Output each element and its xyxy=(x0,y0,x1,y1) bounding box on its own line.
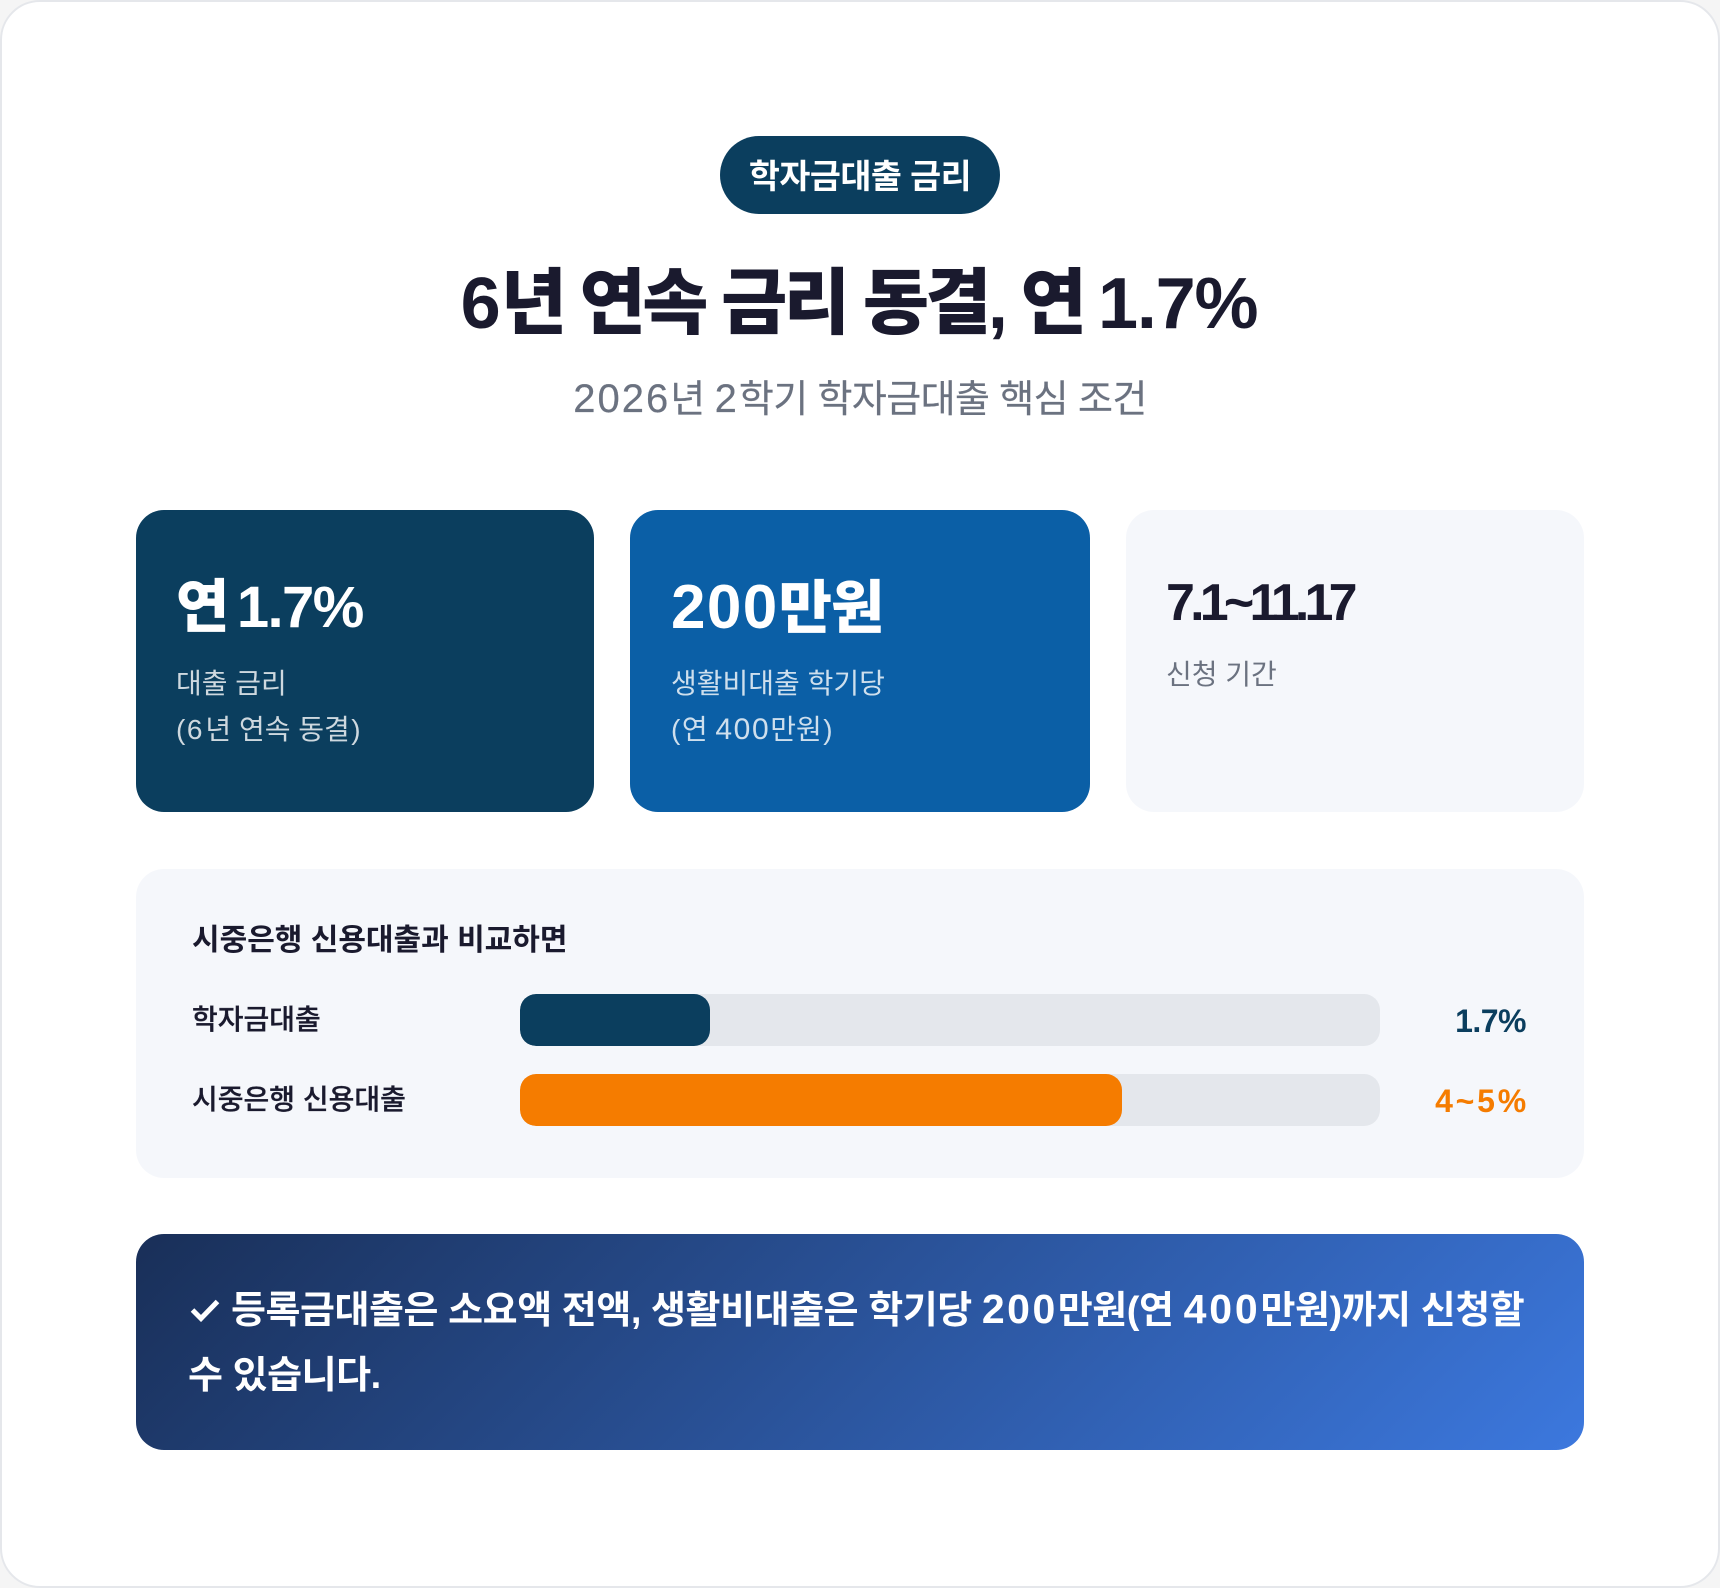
rate label: 대출 금리 xyxy=(176,668,287,699)
row label: bank loan: 시중은행 신용대출 xyxy=(192,1084,406,1115)
loan value: 200만원 xyxy=(671,573,883,642)
subtitle: 2026년 2학기 학자금대출 핵심 조건 xyxy=(573,377,1147,421)
rate label xyxy=(176,668,361,745)
title: 6년 연속 금리 동결, 연 1.7% xyxy=(461,264,1257,344)
comparison heading: 시중은행 신용대출과 비교하면 xyxy=(192,924,567,957)
panel: interest rate xyxy=(136,510,594,812)
row label: student loan: 학자금대출 xyxy=(192,1004,321,1035)
callout xyxy=(136,1234,1584,1450)
panel: rate comparison xyxy=(136,869,1584,1178)
badge: 학자금대출 금리 xyxy=(749,158,971,196)
loan label: 생활비대출 학기당 xyxy=(671,668,885,699)
bar: student loan xyxy=(520,994,1380,1046)
badge xyxy=(720,136,1000,214)
panel: living loan xyxy=(630,510,1090,812)
callout text xyxy=(188,1286,1524,1397)
loan label xyxy=(671,668,885,746)
value: bank loan: 4~5% xyxy=(1435,1083,1529,1119)
bar: bank loan xyxy=(520,1074,1380,1126)
callout text: 등록금대출은 소요액 전액, 생활비대출은 학기당 200만원(연 400만원)까지 신청할 xyxy=(231,1286,1524,1332)
value: student loan: 1.7% xyxy=(1455,1003,1526,1039)
panel: application period xyxy=(1126,510,1584,812)
rate value: 연 1.7% xyxy=(176,575,363,640)
callout text: 수 있습니다. xyxy=(188,1355,381,1397)
period label: 신청 기간 xyxy=(1166,659,1277,690)
rate label: (6년 연속 동결) xyxy=(176,714,361,745)
icon: check mark xyxy=(190,1300,220,1322)
loan label: (연 400만원) xyxy=(671,713,833,746)
period value: 7.1~11.17 xyxy=(1166,574,1353,632)
